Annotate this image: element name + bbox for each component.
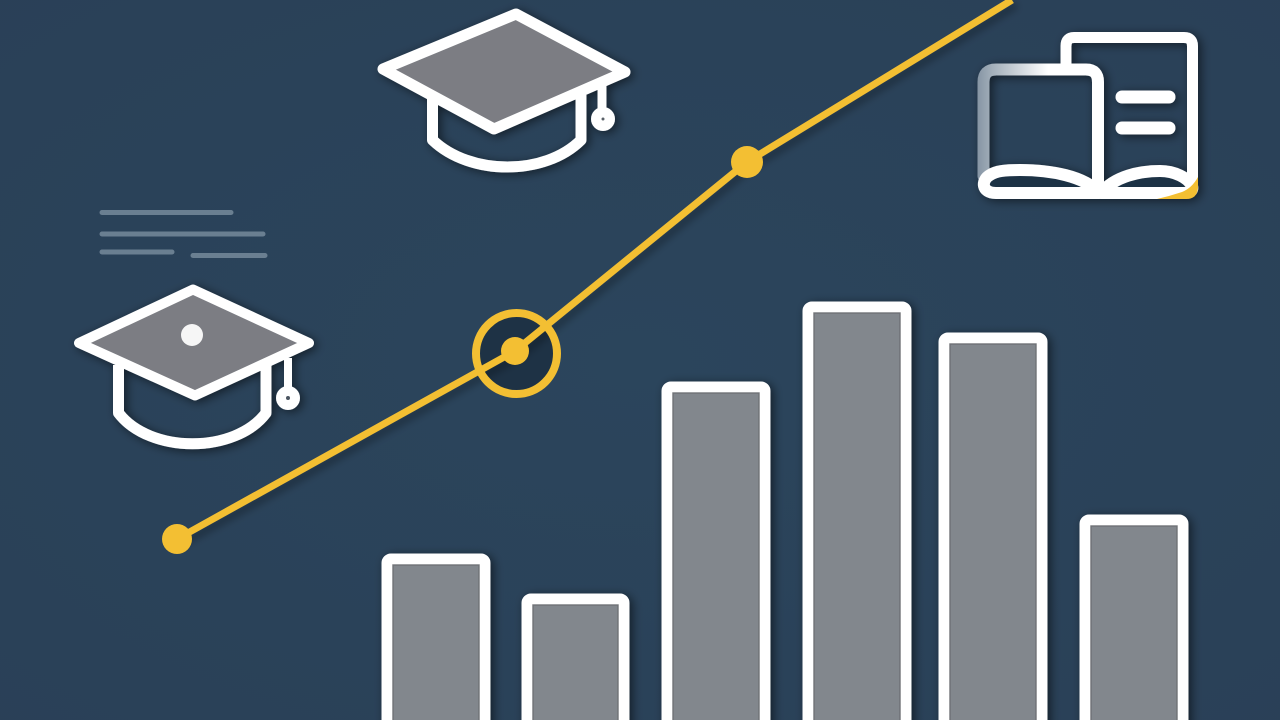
upper point [731,146,763,178]
decorative text lines [102,212,265,256]
front page [984,70,1098,190]
right book leaf [1101,171,1192,193]
highlight ring interior [479,316,555,392]
bar 1 [387,559,485,720]
trend line [177,0,1012,539]
bar 6 [1085,520,1183,720]
yellow corner accent [1157,177,1198,199]
bar inner edge shading [393,313,1177,720]
icon: graduation cap top [383,14,625,167]
back page [1066,38,1192,184]
text lines on page [1122,97,1169,128]
icon: open book [984,38,1198,199]
bar 3 [667,387,765,720]
highlighted point [476,313,557,394]
left book leaf [984,170,1099,193]
bar 4 [808,307,906,720]
bar 5 [944,338,1042,720]
bar chart [387,307,1183,720]
icon: graduation cap left [79,290,309,444]
start point [162,524,192,554]
bar 2 [527,599,624,720]
line chart: rising yellow trend [162,0,1012,554]
